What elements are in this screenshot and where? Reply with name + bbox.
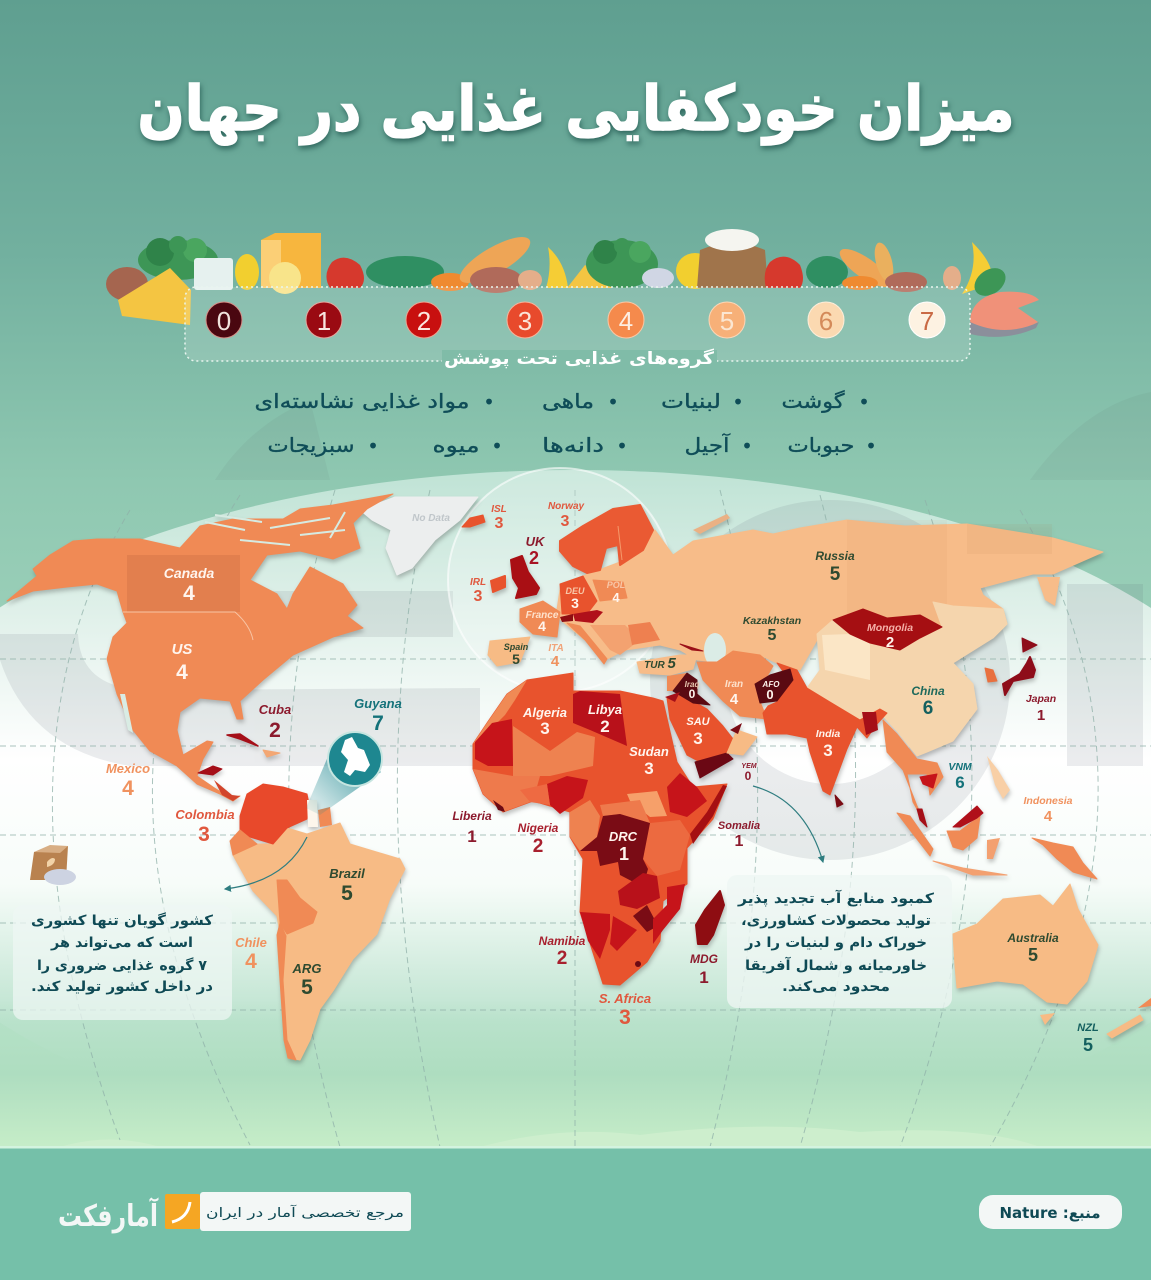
- Greenland: [360, 497, 478, 575]
- label: Algeria: 3: [540, 719, 550, 738]
- food group list: •: [483, 390, 495, 414]
- label: Yemen: [741, 763, 757, 783]
- label: Poland: [607, 580, 625, 605]
- label: Russia: 5: [830, 564, 841, 585]
- country labels: [106, 501, 1099, 1055]
- label: Cuba: 2: [269, 719, 281, 742]
- label: Australia: [1006, 931, 1059, 965]
- label: Norway: 3: [561, 513, 570, 530]
- scale dot 2: [406, 302, 442, 338]
- arrow: Guyana to callout: [225, 837, 307, 889]
- callout: water shortage: تولید محصولات کشاورزی،: [741, 913, 931, 929]
- magnifier circle: Europe: [448, 468, 672, 692]
- food group list: •: [732, 390, 744, 414]
- label: Saudi Arabia: SAU: [686, 716, 711, 728]
- label: Yemen: 0: [745, 769, 752, 783]
- label: Iran: 4: [730, 691, 739, 708]
- label: DRC: [609, 829, 638, 864]
- label: Iceland: ISL: [491, 504, 507, 515]
- label: Guyana: Guyana: [354, 696, 402, 711]
- label: Mongolia: Mongolia: [867, 622, 913, 634]
- label: Iraq: [685, 680, 699, 701]
- label: Iceland: [491, 504, 507, 532]
- label: Canada: Canada: [164, 565, 214, 581]
- illustration: food row: [106, 229, 1039, 337]
- label: Ireland: 3: [474, 588, 483, 605]
- label: Kazakhstan: Kazakhstan: [743, 615, 801, 627]
- label: US: 4: [176, 661, 188, 684]
- label: India: India: [816, 728, 840, 740]
- label: France: France: [526, 610, 559, 621]
- label: Italy: 4: [551, 653, 560, 670]
- scale dot 3: 3: [518, 306, 532, 336]
- label: Italy: [548, 643, 564, 670]
- label: US: US: [172, 641, 192, 658]
- Oceania: [953, 884, 1151, 1038]
- label: Madagascar: 1: [699, 968, 709, 987]
- scale dot 7: [909, 302, 945, 338]
- food group list: گوشت: [782, 389, 845, 413]
- label: Indonesia: [1023, 795, 1073, 825]
- South and East Asia: [755, 602, 1097, 879]
- label: Norway: Norway: [548, 501, 584, 512]
- label: Indonesia: Indonesia: [1023, 795, 1073, 807]
- food group list: •: [616, 434, 628, 458]
- label: New Zealand: NZL: [1077, 1022, 1099, 1034]
- label: Algeria: [522, 705, 567, 738]
- label: Liberia: Liberia: [452, 809, 492, 823]
- label: Namibia: 2: [557, 948, 567, 969]
- food group list: میوه: [432, 433, 480, 457]
- label: Cuba: [259, 702, 291, 742]
- arrow: Yemen to callout: [753, 786, 823, 862]
- label: Sudan: 3: [644, 759, 654, 778]
- label: Algeria: Algeria: [522, 705, 567, 720]
- label: Japan: Japan: [1026, 693, 1056, 705]
- label: Japan: 1: [1037, 707, 1045, 724]
- graticule: [0, 490, 1151, 1147]
- scale dot 1: 1: [317, 306, 331, 336]
- scale dot 4: [608, 302, 644, 338]
- label: Brazil: [329, 866, 365, 905]
- label: DRC: 1: [619, 844, 629, 864]
- label: Germany: [565, 586, 585, 611]
- scale dot 4: 4: [619, 306, 633, 336]
- world map: [7, 494, 1151, 1060]
- food group list: لبنیات: [661, 389, 721, 413]
- label: Colombia: Colombia: [175, 807, 235, 822]
- label: Argentina: ARG: [292, 961, 321, 976]
- scale dot 6: [808, 302, 844, 338]
- food group list: آجیل: [684, 432, 731, 457]
- label: Iceland: 3: [495, 515, 504, 532]
- label: Mongolia: 2: [886, 634, 894, 651]
- food group list: •: [607, 390, 619, 414]
- Middle East: [665, 651, 773, 778]
- label: Germany: DEU: [565, 586, 585, 596]
- label: Sudan: [629, 744, 669, 778]
- scale dot 5: 5: [720, 306, 734, 336]
- label: UK: 2: [529, 548, 539, 568]
- label: Namibia: Namibia: [539, 934, 586, 948]
- logo mark: [165, 1194, 200, 1229]
- tagline box: مرجع تخصصی آمار در ایران: [206, 1204, 404, 1221]
- label: Australia: Australia: [1006, 931, 1059, 945]
- map ocean background: [0, 470, 1151, 1160]
- label: Guyana: [354, 696, 402, 735]
- label: Libya: [588, 702, 622, 736]
- label: Italy: ITA: [548, 643, 564, 654]
- label: Russia: Russia: [815, 549, 855, 563]
- label: Colombia: [175, 807, 235, 846]
- food group list: دانه‌ها: [542, 433, 604, 457]
- label: South Africa: [599, 991, 651, 1029]
- callout: Guyana: ۷ گروه غذایی ضروری را: [37, 957, 207, 974]
- label: Afghanistan: AFO: [762, 680, 780, 689]
- label: Russia: [815, 549, 855, 585]
- label: Chile: [235, 935, 267, 973]
- food group list: •: [491, 434, 503, 458]
- label: Chile: Chile: [235, 935, 267, 950]
- label: Sudan: Sudan: [629, 744, 669, 759]
- label: South Africa: 3: [619, 1006, 631, 1029]
- callout: water shortage: [727, 875, 952, 1008]
- label: Indonesia: 4: [1044, 808, 1053, 825]
- label: Japan: [1026, 693, 1056, 724]
- food group list: سبزیجات: [268, 433, 354, 457]
- label: Poland: POL: [607, 580, 625, 590]
- label: Mongolia: [867, 622, 913, 651]
- food group list: مواد غذایی نشاسته‌ای: [254, 389, 470, 413]
- label: Somalia: [718, 820, 760, 850]
- label: Nigeria: Nigeria: [518, 821, 559, 835]
- label: Madagascar: MDG: [690, 952, 718, 966]
- source pill: منبع: Nature: [999, 1204, 1101, 1222]
- label: Norway: [548, 501, 584, 530]
- label: New Zealand: [1077, 1022, 1099, 1055]
- label: Ireland: IRL: [470, 577, 486, 588]
- label: Ireland: [470, 577, 486, 605]
- scale panel: [185, 287, 970, 370]
- scale dot 0: [206, 302, 242, 338]
- label: Afghanistan: [762, 680, 780, 702]
- label: Spain: 5: [512, 651, 520, 667]
- label: South Africa: S. Africa: [599, 991, 651, 1006]
- label: Somalia: 1: [735, 833, 744, 850]
- callout: water shortage: خوراک دام و لبنیات را در: [744, 935, 927, 951]
- label: Afghanistan: 0: [766, 687, 774, 702]
- label: China: China: [911, 684, 945, 698]
- label: Iraq: 0: [689, 687, 696, 701]
- label: China: 6: [923, 698, 933, 719]
- scale dot 2: 2: [417, 306, 431, 336]
- label: France: [526, 610, 559, 634]
- label: Somalia: Somalia: [718, 820, 760, 832]
- label: Iran: Iran: [725, 679, 743, 690]
- callout: water shortage: محدود می‌کند.: [782, 979, 890, 995]
- food group list: [254, 389, 877, 458]
- label: Vietnam: [948, 761, 972, 792]
- South America: [230, 784, 405, 1060]
- label: Namibia: [539, 934, 586, 969]
- label: India: 3: [823, 741, 833, 760]
- callout: Guyana: در داخل کشور تولید کند.: [31, 979, 213, 995]
- label: France: 4: [538, 618, 546, 634]
- label: UK: [526, 534, 546, 568]
- callout: water shortage: خاورمیانه و شمال آفریقا: [745, 956, 927, 974]
- label: Libya: Libya: [588, 702, 622, 717]
- gray watermark shapes: [0, 538, 1143, 822]
- label: Turkey: TUR 5: [644, 655, 676, 672]
- North America: [7, 494, 393, 801]
- label: Kazakhstan: [743, 615, 801, 644]
- food group list: •: [858, 390, 870, 414]
- label: Liberia: 1: [467, 827, 477, 846]
- scale dot 3: [507, 302, 543, 338]
- label: Colombia: 3: [198, 823, 210, 846]
- label: China: [911, 684, 945, 719]
- label: Mexico: Mexico: [106, 761, 150, 776]
- label: Libya: 2: [600, 717, 610, 736]
- label: Germany: 3: [571, 595, 579, 611]
- label: Greenland: No Data: [412, 513, 450, 524]
- label: Spain: Spain: [504, 642, 529, 652]
- label: Chile: 4: [245, 950, 257, 973]
- footer band: [0, 1146, 1151, 1280]
- label: Poland: 4: [612, 590, 620, 605]
- Europe and Russia base: [462, 505, 1103, 675]
- scale panel: گروه‌های غذایی تحت پوشش: [444, 348, 714, 369]
- label: Mexico: [106, 761, 150, 800]
- food group list: •: [865, 434, 877, 458]
- food group list: •: [367, 434, 379, 458]
- logo wordmark: آمارفکت: [58, 1197, 159, 1234]
- label: Kazakhstan: 5: [768, 627, 777, 644]
- label: Argentina: [292, 961, 321, 999]
- label: Liberia: [452, 809, 492, 846]
- label: UK: UK: [526, 534, 546, 549]
- label: Guyana: 7: [372, 712, 384, 735]
- label: Canada: [164, 565, 214, 605]
- label: New Zealand: 5: [1083, 1035, 1093, 1055]
- title: میزان خودکفایی غذایی در جهان: [138, 72, 1014, 145]
- label: Brazil: Brazil: [329, 866, 365, 881]
- label: Vietnam: VNM: [948, 761, 972, 773]
- label: DRC: DRC: [609, 829, 638, 844]
- scale dot 6: 6: [819, 306, 833, 336]
- label: Argentina: 5: [301, 976, 313, 999]
- label: Iraq: Iraq: [685, 680, 699, 689]
- source pill: [979, 1195, 1122, 1229]
- label: Vietnam: 6: [955, 773, 965, 792]
- label: Spain: [504, 642, 529, 667]
- label: Canada: 4: [183, 582, 195, 605]
- label: India: [816, 728, 840, 760]
- label: Brazil: 5: [341, 882, 353, 905]
- food group list: •: [741, 434, 753, 458]
- scale dot 1: [306, 302, 342, 338]
- callout: Guyana: است که می‌تواند هر: [50, 935, 193, 951]
- label: Australia: 5: [1028, 945, 1038, 965]
- callout: water shortage: کمبود منابع آب تجدید پذیر: [737, 889, 935, 907]
- callout: Guyana: کشور گویان تنها کشوری: [31, 912, 214, 929]
- label: Cuba: Cuba: [259, 702, 291, 717]
- label: Saudi Arabia: [686, 716, 711, 748]
- food group list: ماهی: [542, 389, 594, 413]
- label: Nigeria: [518, 821, 559, 857]
- tagline box: [200, 1192, 411, 1231]
- label: Mexico: 4: [122, 777, 134, 800]
- food group list: حبوبات: [788, 433, 854, 457]
- icon: sack and fish: [30, 845, 76, 885]
- Africa: [473, 673, 727, 985]
- callout: Guyana: [13, 905, 232, 1020]
- label: US: [172, 641, 192, 684]
- scale dot 0: 0: [217, 306, 231, 336]
- label: Madagascar: [690, 952, 718, 987]
- Guyana pin: [306, 732, 382, 815]
- label: Yemen: YEM: [741, 763, 757, 770]
- scale dot 7: 7: [920, 306, 934, 336]
- scale dot 5: [709, 302, 745, 338]
- label: Iran: [725, 679, 743, 708]
- label: Nigeria: 2: [533, 836, 543, 857]
- label: Saudi Arabia: 3: [693, 729, 703, 748]
